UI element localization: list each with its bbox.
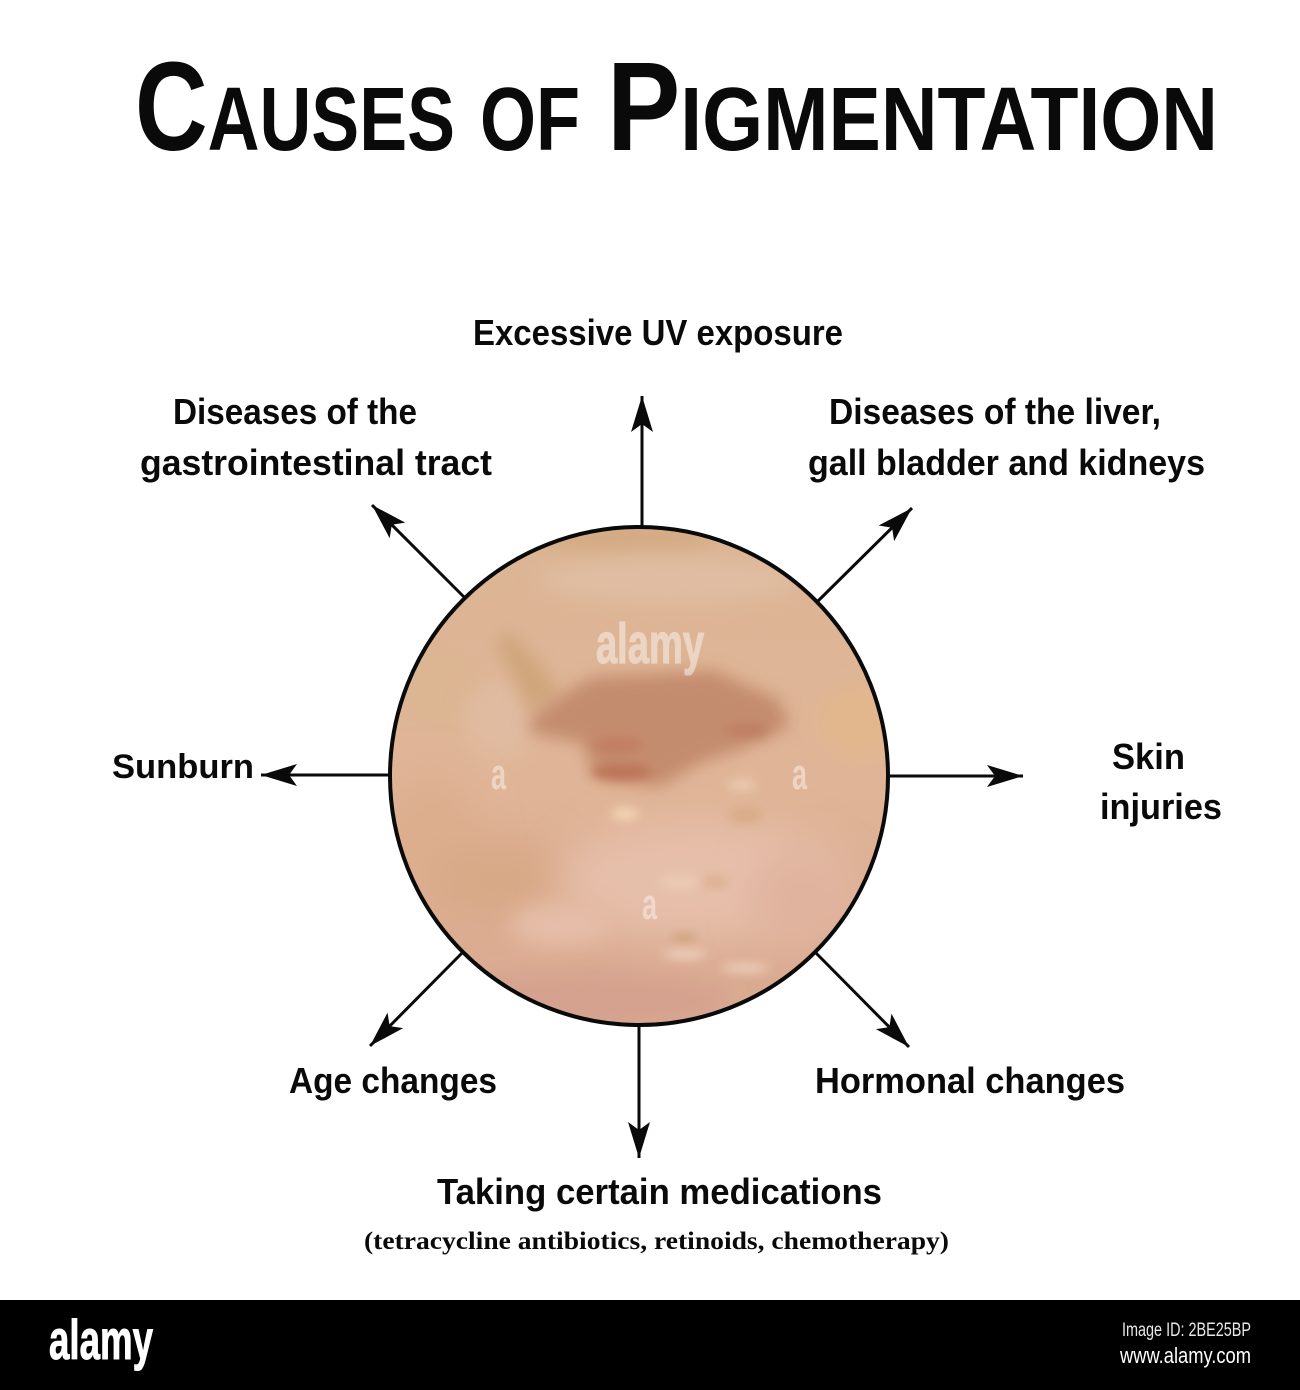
arrow: down-right to hormonal changes — [816, 953, 909, 1047]
arrow: up to UV exposure — [640, 396, 644, 527]
label: taking certain medications — [364, 1171, 949, 1255]
label: skin injuries — [1100, 736, 1222, 827]
watermark on skin — [491, 612, 807, 929]
pigmented patch — [495, 632, 560, 715]
footer logo: alamy — [49, 1308, 153, 1371]
watermark on skin: a — [642, 880, 657, 929]
arrow: right to skin injuries — [888, 774, 1023, 778]
circle outline — [390, 527, 888, 1025]
skin circle — [380, 522, 900, 1032]
footer url: www.alamy.com — [1119, 1343, 1251, 1368]
arrow: up-right to liver diseases — [817, 508, 912, 602]
arrow: left to sunburn — [261, 774, 389, 776]
title — [135, 36, 1218, 177]
label: diseases of the liver, gall bladder and kidneys: Diseases of the liver, — [829, 391, 1161, 432]
label: diseases of the liver, gall bladder and kidneys: gall bladder and kidneys — [808, 442, 1205, 483]
watermark on skin: a — [491, 750, 506, 799]
label: diseases of the gastrointestinal tract: gastrointestinal tract — [140, 442, 492, 483]
label: taking certain medications: Taking certain medications — [437, 1171, 882, 1212]
label: sunburn: Sunburn — [112, 748, 254, 786]
skin spots — [611, 808, 639, 820]
arrow: down-left to age changes — [370, 952, 463, 1046]
label: hormonal changes: Hormonal changes — [815, 1060, 1125, 1101]
title: PIGMENTATION — [607, 36, 1218, 177]
label: age changes: Age changes — [289, 1060, 497, 1101]
label: skin injuries: injuries — [1100, 786, 1222, 827]
arrow: up-left to gastrointestinal diseases — [372, 505, 465, 598]
watermark on skin: alamy — [596, 612, 704, 676]
label: diseases of the gastrointestinal tract — [140, 391, 492, 483]
label: diseases of the liver, gall bladder and kidneys — [808, 391, 1205, 483]
footer bar — [0, 1300, 1300, 1390]
label: excessive UV exposure: Excessive UV exposure — [473, 312, 843, 353]
title: CAUSES — [135, 36, 455, 177]
title: OF — [480, 70, 580, 170]
footer image id: Image ID: 2BE25BP — [1122, 1320, 1251, 1341]
label: diseases of the gastrointestinal tract: Diseases of the — [173, 391, 417, 432]
note: medication examples: (tetracycline antibiotics, retinoids, chemotherapy) — [364, 1228, 949, 1255]
label: skin injuries: Skin — [1112, 736, 1185, 777]
watermark on skin: a — [792, 750, 807, 799]
arrow: down to medications — [638, 1027, 640, 1158]
